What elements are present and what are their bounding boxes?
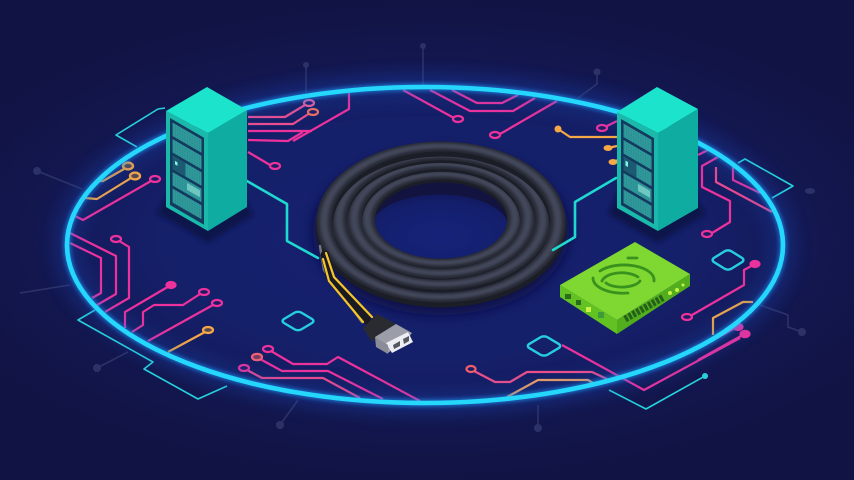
- traces: bottom left: [239, 346, 420, 401]
- traces: top centre: [403, 90, 617, 138]
- coil ring 2: [339, 155, 543, 287]
- router ports and lights: [565, 284, 684, 319]
- traces: left side: [70, 176, 222, 352]
- left server rack panel: [170, 118, 204, 225]
- circuit traces: pink and orange: [70, 90, 772, 401]
- traces: left server: [248, 93, 349, 169]
- coil ring 3: [354, 164, 528, 276]
- router ring emblem: [593, 258, 654, 293]
- cyan diamonds: [281, 249, 745, 357]
- faint grey connector lines outside the ring: [20, 43, 815, 432]
- router top face: [560, 242, 690, 320]
- traces: right side: [682, 150, 772, 320]
- coil ring 1: [324, 146, 558, 302]
- right server top face: [617, 87, 698, 133]
- right server shadow: [608, 190, 706, 243]
- coil ring 4: [367, 174, 515, 266]
- traces: upper-left orange: [85, 163, 140, 199]
- right server to cable link: [553, 178, 616, 250]
- cyan outline brackets: [78, 108, 793, 409]
- green router: [560, 242, 690, 334]
- cable wires: [320, 246, 372, 322]
- right server: [617, 87, 698, 231]
- left server top face: [166, 87, 247, 133]
- left server to cable link: [240, 177, 318, 258]
- left server front face: [166, 111, 208, 231]
- cable coil: [324, 146, 558, 302]
- traces: orange near right server: [554, 126, 618, 165]
- glowing ring: [67, 87, 783, 403]
- traces: bottom right: [466, 302, 753, 397]
- right server rack panel: [621, 119, 654, 224]
- left server shadow: [157, 190, 253, 243]
- left server: [166, 87, 247, 231]
- cable shadow: [313, 149, 569, 315]
- cable connector: [363, 314, 413, 354]
- right server front face: [617, 112, 658, 231]
- coil centre hole: [372, 194, 508, 258]
- left server right face: [208, 110, 247, 231]
- right server right face: [658, 109, 698, 231]
